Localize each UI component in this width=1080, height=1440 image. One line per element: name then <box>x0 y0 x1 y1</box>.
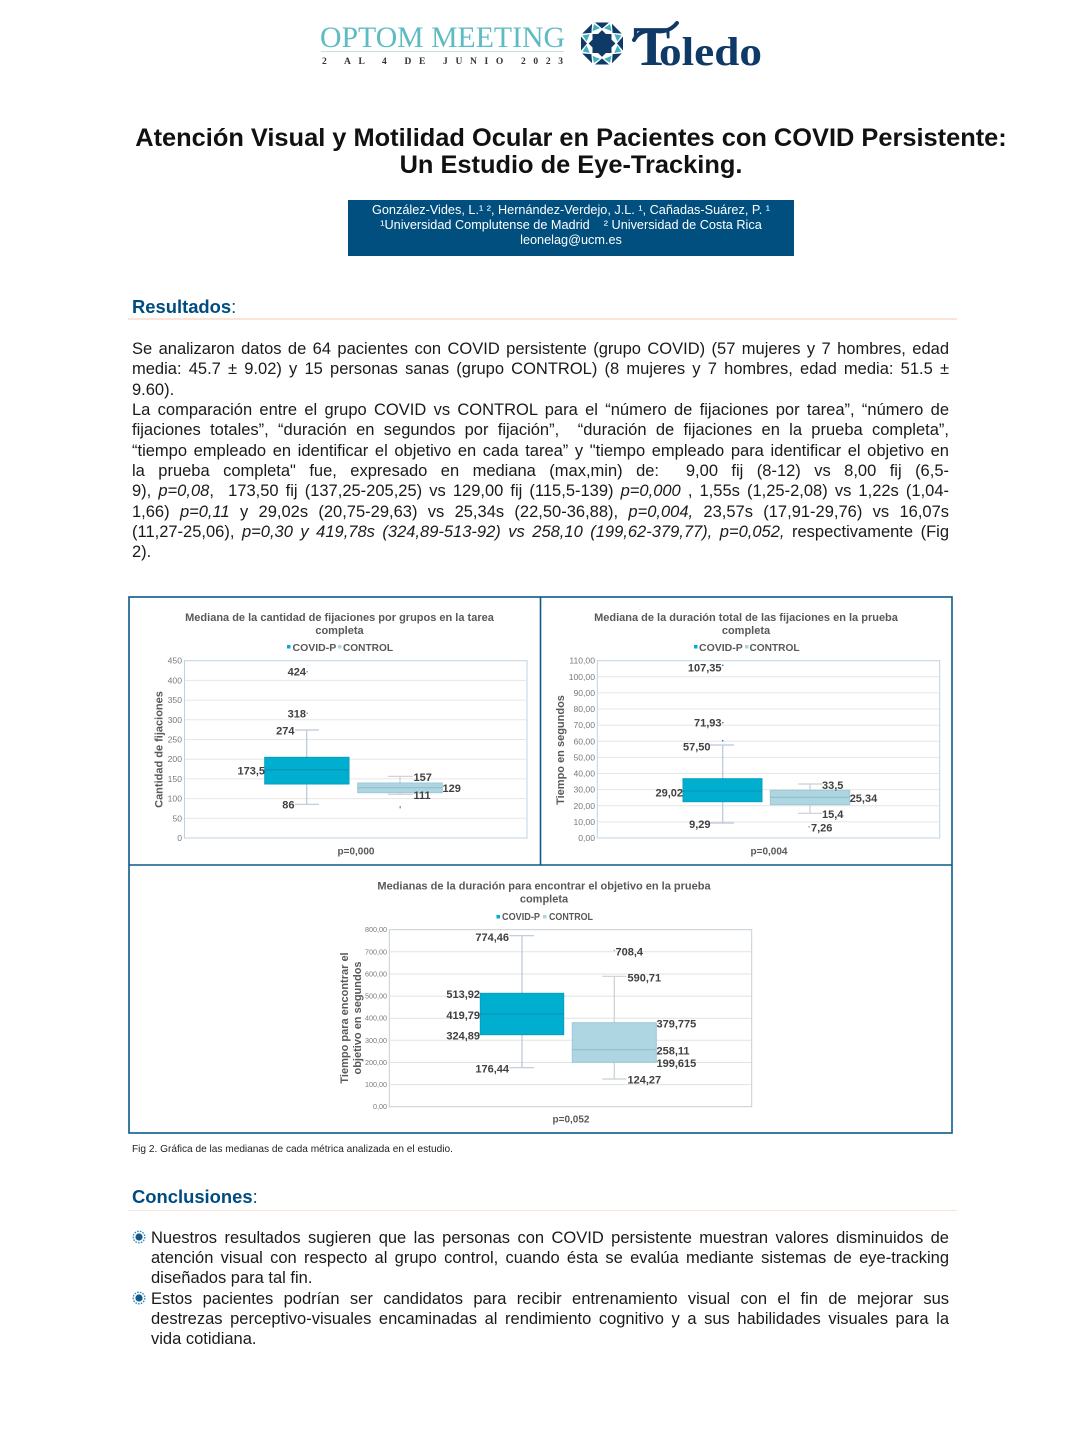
chart: duración para encontrar el objetivo: Tiempo para encontrar el <box>339 952 351 1084</box>
chart: duración total de las fijaciones: 110,00 <box>569 656 595 666</box>
chart: cantidad de fijaciones: 0 <box>177 833 182 843</box>
chart: duración para encontrar el objetivo: 0,00 <box>373 1102 387 1111</box>
chart: duración total de las fijaciones: 50,00 <box>573 752 595 762</box>
chart: cantidad de fijaciones: 111 <box>414 790 431 802</box>
conclusion 1 text: Nuestros resultados sugieren que las personas con COVID persistente muestran valores disminuidos de <box>151 1228 949 1246</box>
chart: cantidad de fijaciones: 173,5 <box>237 766 265 778</box>
title <box>135 124 1007 179</box>
results text: “tiempo empleado en identificar el objetivo en cada tarea” y "tiempo empleado para identificar el objetivo en <box>132 442 949 460</box>
results text: (11,27-25,06), p=0,30 y 419,78s (324,89-513-92) vs 258,10 (199,62-379,77), p=0,052, respectivamente (Fig <box>132 523 949 541</box>
results text: fijaciones totales”, “duración en segundos por fijación”, “duración de fijaciones en la prueba completa”, <box>132 421 949 439</box>
chart: duración total de las fijaciones: completa <box>722 625 771 637</box>
results text: 9.60). <box>132 381 174 399</box>
chart: duración total de las fijaciones: 71,93 <box>694 718 722 730</box>
conclusion 1 text: diseñados para tal fin. <box>151 1269 312 1287</box>
chart: duración total de las fijaciones: 7,26 <box>811 822 832 834</box>
chart: cantidad de fijaciones: 400 <box>168 675 182 685</box>
chart: duración para encontrar el objetivo: 419,79 <box>446 1010 480 1022</box>
chart: duración para encontrar el objetivo: 176,44 <box>475 1063 510 1075</box>
figure panel: three box plots <box>128 596 953 1134</box>
logo wordmark: Toledo: oledo <box>659 29 762 74</box>
logo wordmark: Toledo: T <box>633 16 670 78</box>
chart: duración total de las fijaciones: 90,00 <box>573 688 595 698</box>
chart: duración total de las fijaciones: 60,00 <box>573 736 595 746</box>
chart: cantidad de fijaciones: 100 <box>168 794 182 804</box>
conclusion 1 text: atención visual con respecto al grupo control, cuando ésta se evalúa mediante sistemas de eye-tracking <box>151 1249 949 1267</box>
chart: duración total de las fijaciones: 20,00 <box>573 801 595 811</box>
chart: duración para encontrar el objetivo: 708,4 <box>616 946 644 958</box>
chart: duración para encontrar el objetivo: 500,00 <box>365 992 387 1001</box>
chart: cantidad de fijaciones: 350 <box>168 695 182 705</box>
chart: duración total de las fijaciones: 25,34 <box>850 793 878 805</box>
title: Atención Visual y Motilidad Ocular en Pacientes con COVID Persistente: <box>135 124 1007 152</box>
chart: cantidad de fijaciones: completa <box>315 625 365 637</box>
authors box: leonelag@ucm.es <box>520 233 622 247</box>
chart: duración total de las fijaciones: Tiempo en segundos <box>555 695 567 805</box>
chart: cantidad de fijaciones: 129 <box>442 783 461 795</box>
chart: duración para encontrar el objetivo: 379,775 <box>656 1018 696 1030</box>
chart: duración total de las fijaciones: COVID-P <box>699 642 743 654</box>
title: Un Estudio de Eye-Tracking. <box>400 151 742 179</box>
chart: duración para encontrar el objetivo: COVID-P <box>502 911 540 923</box>
results text: 1,66) p=0,11 y 29,02s (20,75-29,63) vs 25,34s (22,50-36,88), p=0,004, 23,57s (17,91-29,76) vs 16,07s <box>132 503 949 521</box>
chart: duración para encontrar el objetivo: 400,00 <box>365 1014 387 1023</box>
chart: duración total de las fijaciones: 100,00 <box>569 672 595 682</box>
chart: duración total de las fijaciones: CONTROL <box>750 642 800 654</box>
chart: cantidad de fijaciones: p=0,000 <box>338 846 375 858</box>
chart: cantidad de fijaciones: Cantidad de fijaciones <box>154 691 166 808</box>
icon: bullet 1 <box>132 1230 146 1244</box>
chart: cantidad de fijaciones: 450 <box>168 656 182 666</box>
conclusion 1 text <box>151 1228 949 1287</box>
chart: duración para encontrar el objetivo: 774,46 <box>475 932 509 944</box>
logo: Optom Meeting Toledo <box>320 16 762 78</box>
authors box <box>348 200 794 256</box>
chart: duración total de las fijaciones: 40,00 <box>573 768 595 778</box>
chart: cantidad de fijaciones: 424 <box>288 667 307 679</box>
chart: cantidad de fijaciones <box>154 612 527 858</box>
results text: 9), p=0,08, 173,50 fij (137,25-205,25) vs 129,00 fij (115,5-139) p=0,000 , 1,55s (1,25-2,08) vs 1,22s (1,04- <box>132 482 949 500</box>
results text: media: 45.7 ± 9.02) y 15 personas sanas (grupo CONTROL) (8 mujeres y 7 hombres, edad media: 51.5 ± <box>132 360 949 378</box>
chart: cantidad de fijaciones: 274 <box>276 726 295 738</box>
authors box: ¹Universidad Complutense de Madrid ² Universidad de Costa Rica <box>380 218 762 232</box>
chart: duración para encontrar el objetivo: p=0,052 <box>553 1114 590 1126</box>
chart: duración para encontrar el objetivo: objetivo en segundos <box>352 961 364 1075</box>
chart: cantidad de fijaciones: 300 <box>168 715 182 725</box>
logo emblem <box>581 22 623 64</box>
chart: cantidad de fijaciones: COVID-P <box>292 642 336 654</box>
icon: bullet 2 <box>132 1292 146 1304</box>
conclusion 2 text: Estos pacientes podrían ser candidatos para recibir entrenamiento visual con el fin de mejorar sus <box>151 1290 949 1308</box>
chart: duración para encontrar el objetivo: 590,71 <box>628 972 661 984</box>
chart: duración total de las fijaciones: 80,00 <box>573 704 595 714</box>
logo wordmark: Toledo <box>633 16 762 78</box>
results text: La comparación entre el grupo COVID vs CONTROL para el “número de fijaciones por tarea”, “número de <box>132 401 949 419</box>
chart: duración para encontrar el objetivo: 200,00 <box>365 1058 387 1067</box>
chart: cantidad de fijaciones: 250 <box>168 734 182 744</box>
chart: duración para encontrar el objetivo: 258,11 <box>656 1045 690 1057</box>
chart: cantidad de fijaciones: 318 <box>288 708 306 720</box>
chart: duración total de las fijaciones: 0,00 <box>578 833 595 843</box>
chart: duración para encontrar el objetivo: 124,27 <box>628 1075 661 1087</box>
results text: la prueba completa" fue, expresado en mediana (max,min) de: 9,00 fij (8-12) vs 8,00 fij (6,5- <box>132 462 949 480</box>
chart: duración para encontrar el objetivo: 600,00 <box>365 970 387 978</box>
logo wordmark: OPTOM MEETING: OPTOM MEETING <box>320 21 565 54</box>
chart: cantidad de fijaciones: CONTROL <box>343 642 394 654</box>
conclusion 2 text: vida cotidiana. <box>151 1330 256 1348</box>
chart: duración total de las fijaciones: 30,00 <box>573 785 595 795</box>
chart: duración total de las fijaciones: p=0,004 <box>751 846 788 858</box>
chart: duración para encontrar el objetivo: 300,00 <box>365 1036 387 1045</box>
chart: duración para encontrar el objetivo: 513,92 <box>446 989 480 1001</box>
authors box: González-Vides, L.¹ ², Hernández-Verdejo, J.L. ¹, Cañadas-Suárez, P. ¹ <box>372 203 770 217</box>
chart: duración para encontrar el objetivo <box>339 880 752 1126</box>
figure caption: Fig 2. Gráfica de las medianas de cada métrica analizada en el estudio. <box>132 1144 453 1155</box>
results text: Se analizaron datos de 64 pacientes con COVID persistente (grupo COVID) (57 mujeres y 7 hombres, edad <box>132 340 949 358</box>
chart: duración total de las fijaciones: 70,00 <box>573 720 595 730</box>
chart: duración para encontrar el objetivo: 324,89 <box>446 1030 480 1042</box>
chart: duración para encontrar el objetivo: CONTROL <box>549 911 593 923</box>
logo date: 2 AL 4 DE JUNIO 2023 <box>322 57 563 67</box>
heading: Resultados: Resultados: <box>132 296 236 317</box>
chart: cantidad de fijaciones: 200 <box>168 754 182 764</box>
chart: duración total de las fijaciones: Mediana de la duración total de las fijaciones en la prueba <box>594 612 899 624</box>
chart: cantidad de fijaciones: 150 <box>168 774 182 784</box>
chart: duración total de las fijaciones: 107,35 <box>688 663 722 675</box>
chart: cantidad de fijaciones: 86 <box>282 800 294 812</box>
results text: 2). <box>132 543 151 561</box>
chart: duración para encontrar el objetivo: 199,615 <box>656 1058 696 1070</box>
chart: duración para encontrar el objetivo: 800,00 <box>365 925 387 934</box>
conclusion 2 text <box>151 1290 950 1348</box>
heading: Conclusiones: Conclusiones: <box>132 1186 258 1207</box>
chart: duración total de las fijaciones: 33,5 <box>822 780 843 792</box>
chart: cantidad de fijaciones: Mediana de la cantidad de fijaciones por grupos en la tarea <box>185 612 495 624</box>
chart: cantidad de fijaciones: 50 <box>172 813 182 823</box>
conclusion 2 text: destrezas perceptivo-visuales encaminadas al rendimiento cognitivo y a sus habilidades visuales para la <box>151 1310 949 1328</box>
chart: duración total de las fijaciones: 57,50 <box>683 741 710 753</box>
chart: cantidad de fijaciones: 157 <box>414 772 432 784</box>
results text <box>132 340 949 561</box>
chart: duración total de las fijaciones: 29,02 <box>655 788 683 800</box>
chart: duración total de las fijaciones: 15,4 <box>822 809 844 821</box>
chart: duración total de las fijaciones: 10,00 <box>573 817 595 827</box>
chart: duración para encontrar el objetivo: 700,00 <box>365 947 387 956</box>
chart: duración total de las fijaciones: 9,29 <box>689 819 710 831</box>
chart: duración para encontrar el objetivo: Medianas de la duración para encontrar el objetivo en la prueba <box>377 880 711 892</box>
chart: duración para encontrar el objetivo: 100,00 <box>365 1080 387 1089</box>
chart: duración total de las fijaciones <box>555 612 940 858</box>
chart: duración para encontrar el objetivo: completa <box>520 894 569 906</box>
